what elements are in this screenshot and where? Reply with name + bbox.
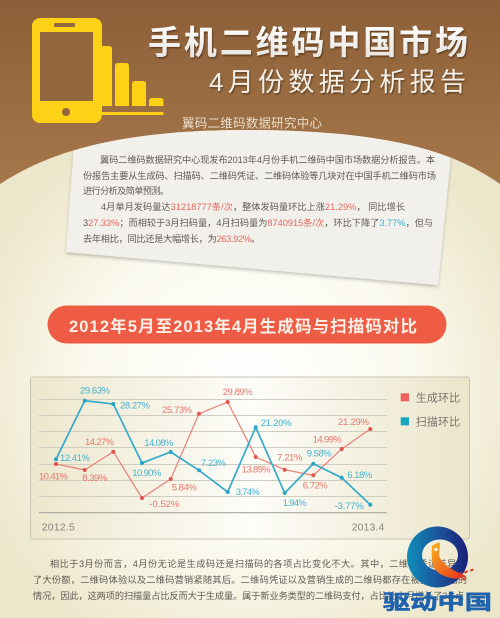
red value labels: 6.72% bbox=[303, 480, 328, 492]
series: generate (red) bbox=[54, 400, 372, 500]
body paragraph: 情况，因此，这两项的扫描量占比反而大于生成量。属于新业务类型的二维码支付，占比比上月增长了2.6点 bbox=[33, 590, 464, 601]
series: scan (blue) bbox=[54, 399, 372, 507]
red value labels: 14.99% bbox=[313, 434, 342, 446]
blue value labels: 12.41% bbox=[60, 453, 91, 464]
icon: red sparks bbox=[458, 568, 474, 581]
subtitle: 4月份数据分析报告 bbox=[209, 67, 466, 97]
heading pill: 2012年5月至2013年4月生成码与扫描码对比 bbox=[69, 316, 417, 336]
blue value labels bbox=[60, 386, 373, 512]
red value labels: -0.52% bbox=[149, 499, 180, 510]
icon: Q ring bbox=[407, 526, 468, 588]
title: 手机二维码中国市场 bbox=[148, 24, 468, 61]
header background bbox=[0, 0, 500, 200]
blue value labels: 14.08% bbox=[144, 438, 174, 449]
intro line 1: 翼码二维码数据研究中心现发布2013年4月份手机二维码中国市场数据分析报告。本 bbox=[100, 154, 435, 165]
red value labels: 10.41% bbox=[39, 472, 69, 482]
panel: intro paper bbox=[66, 120, 453, 285]
icon: Q tail bbox=[432, 542, 466, 579]
beige background arc bbox=[0, 130, 500, 618]
legend: 扫描环比 bbox=[416, 414, 460, 428]
blue value labels: 6.18% bbox=[347, 470, 373, 481]
blue value labels: 1.94% bbox=[283, 498, 307, 509]
x axis end label: 2013.4 bbox=[352, 522, 384, 534]
source line: 翼码二维码数据研究中心 bbox=[182, 116, 322, 130]
blue value labels: 10.90% bbox=[132, 468, 162, 479]
body paragraph: 相比于3月份而言，4月份无论是生成码还是扫描码的各项占比变化不大。其中，二维码凭证差异然 bbox=[50, 558, 466, 569]
panel: line chart bbox=[30, 377, 470, 539]
red value labels: 13.89% bbox=[242, 464, 271, 476]
red value labels: 25.73% bbox=[162, 405, 193, 416]
blue value labels: 3.74% bbox=[236, 487, 260, 498]
red value labels: 29.89% bbox=[223, 387, 253, 398]
blue value labels: 7.23% bbox=[201, 458, 227, 469]
legend: 生成环比 bbox=[416, 390, 460, 404]
intro line 6: 去年相比，同比还是大幅增长，为263.92%。 bbox=[83, 233, 260, 244]
intro line 5: 327.33%；而相较于3月扫码量，4月扫码量为8740915条/次，环比下降了3.77%，但与 bbox=[83, 217, 433, 228]
intro line 4: 4月单月发码量达31218777条/次，整体发码量环比上涨21.29%， 同比增长 bbox=[101, 201, 405, 212]
x axis start label: 2012.5 bbox=[42, 522, 75, 534]
blue value labels: 9.58% bbox=[307, 448, 332, 460]
legend bbox=[401, 390, 460, 428]
blue value labels: 29.63% bbox=[80, 386, 111, 396]
red value labels: 14.27% bbox=[85, 437, 115, 448]
brand text: 驱动中国 bbox=[383, 591, 492, 614]
red value labels: 7.21% bbox=[277, 452, 303, 464]
blue value labels: 28.27% bbox=[120, 400, 151, 412]
blue value labels: 21.20% bbox=[261, 418, 292, 429]
red value labels: 21.29% bbox=[338, 417, 370, 428]
body paragraph: 了大份额，二维码体验以及二维码营销紧随其后。二维码凭证以及营销生成的二维码都存在被多次扫描的 bbox=[33, 574, 467, 585]
body paragraph bbox=[33, 558, 467, 601]
intro line 2: 份报告主要从生成码、扫描码、二维码凭证、二维码体验等几块对在中国手机二维码市场 bbox=[83, 170, 436, 181]
watermark logo bbox=[383, 526, 492, 614]
heading pill bbox=[48, 306, 446, 344]
red value labels: 5.84% bbox=[172, 482, 197, 494]
red value labels: 8.39% bbox=[82, 473, 108, 484]
intro line 3: 进行分析及简单预测。 bbox=[83, 185, 169, 196]
icon: phone with bars bbox=[32, 18, 164, 123]
blue value labels: -3.77% bbox=[335, 501, 364, 512]
red value labels bbox=[39, 387, 370, 510]
